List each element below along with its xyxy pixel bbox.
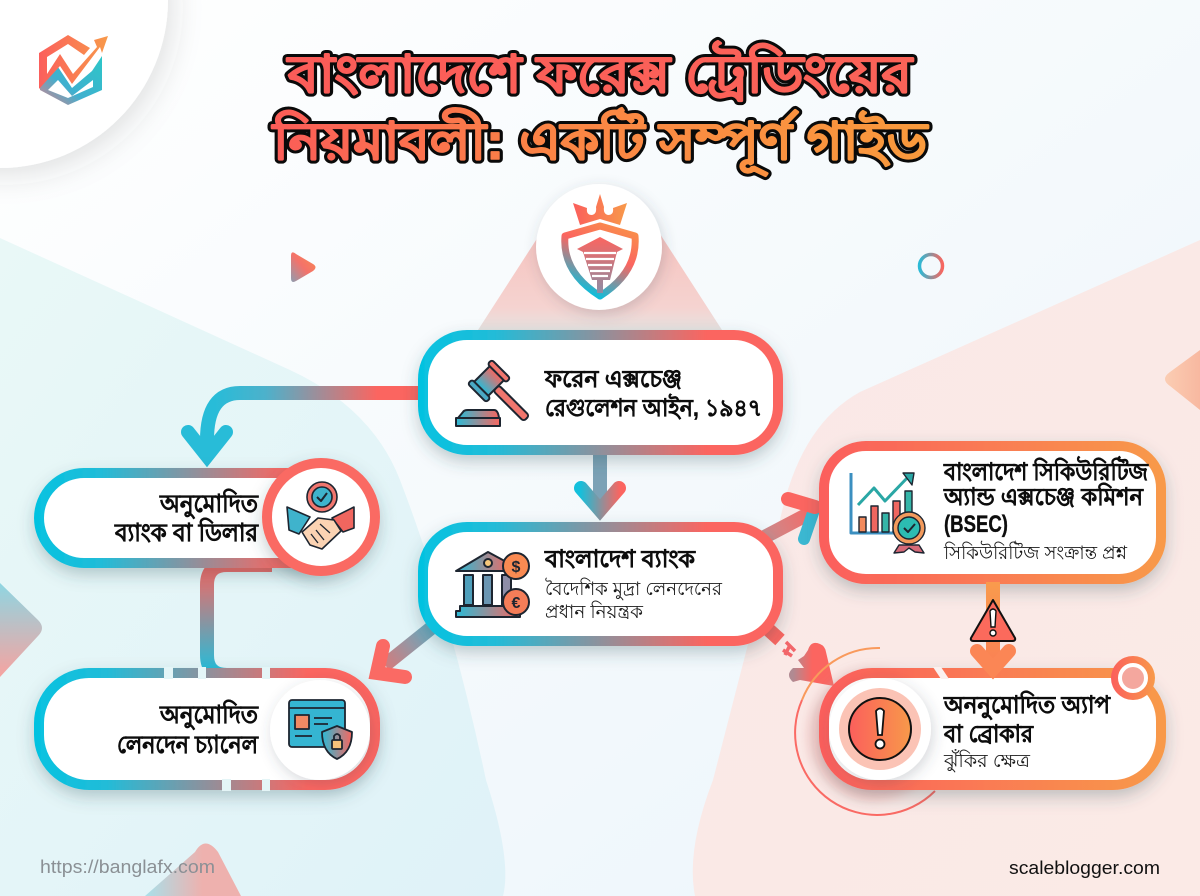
panel: BSEC xyxy=(824,446,1161,579)
text: label: লেনদেন চ্যানেল xyxy=(117,731,259,759)
text: coin symbols: € xyxy=(512,595,521,612)
text: label and note: বা ব্রোকার xyxy=(943,721,1034,748)
footer: left url: https://banglafx.com xyxy=(40,857,215,877)
panel: approved bank or dealer xyxy=(39,463,375,571)
text: bank name and role: প্রধান নিয়ন্ত্রক xyxy=(545,601,644,623)
text: act name: ফরেন এক্সচেঞ্জ xyxy=(544,366,682,393)
text: label: ব্যাংক বা ডিলার xyxy=(114,517,259,547)
text: label and note: ঝুঁকির ক্ষেত্র xyxy=(943,749,1031,772)
text: label: অনুমোদিত xyxy=(159,699,259,731)
icon: bank with coins xyxy=(456,552,529,617)
text: label and note: অননুমোদিত অ্যাপ xyxy=(943,690,1112,720)
logo badge: corner circle xyxy=(0,0,168,168)
title: বাংলাদেশে ফরেক্স ট্রেডিংয়ের xyxy=(286,41,915,104)
icon: gavel xyxy=(456,360,538,430)
arrow: broken link to unapproved brokers xyxy=(760,622,834,686)
text: act name xyxy=(544,366,762,422)
title: বাংলাদেশে ফরেক্স ট্রেডিংয়ের xyxy=(286,41,915,104)
icon: browser with lock shield xyxy=(289,700,352,759)
decorative rings around warning xyxy=(795,648,940,815)
text: act name: রেগুলেশন আইন, ১৯৪৭ xyxy=(545,393,762,422)
icon: warning circle xyxy=(839,688,921,770)
text: bank name and role: বাংলাদেশ ব্যাংক xyxy=(544,546,696,573)
text: BSEC name and note xyxy=(943,456,1149,564)
arrow: law to Bangladesh Bank xyxy=(581,452,619,510)
title: নিয়মাবলী: একটি সম্পূর্ণ গাইড xyxy=(271,108,929,177)
text: bank name and role: বৈদেশিক মুদ্রা লেনদেনের xyxy=(545,578,723,600)
panel: Bangladesh Bank xyxy=(423,527,778,641)
arrow: Bangladesh Bank to approved channel xyxy=(377,625,435,677)
text: BSEC name and note: বাংলাদেশ সিকিউরিটিজ xyxy=(943,456,1149,486)
icon: shield with crown xyxy=(565,194,635,296)
icon: logo hexagon with arrow xyxy=(39,35,108,105)
icon: chart with award xyxy=(851,473,925,553)
title: নিয়মাবলী: একটি সম্পূর্ণ গাইড xyxy=(271,108,929,177)
arrow: Bangladesh Bank to BSEC xyxy=(755,499,815,542)
top shield badge xyxy=(536,184,662,310)
icon: warning triangle xyxy=(971,600,1015,641)
icon: corner ring marker xyxy=(1111,656,1155,700)
text: BSEC name and note: সিকিউরিটিজ সংক্রান্ত প্রশ্ন xyxy=(943,541,1128,564)
text: coin symbols xyxy=(512,559,521,612)
panel: unapproved apps or brokers xyxy=(824,667,1161,785)
title xyxy=(271,41,929,177)
border gaps xyxy=(164,667,270,791)
icon: handshake with badge xyxy=(287,482,354,549)
text: label xyxy=(117,699,259,759)
text: label: অনুমোদিত xyxy=(159,488,259,520)
text: BSEC name and note: (BSEC) xyxy=(944,511,1008,538)
border notch xyxy=(933,667,949,679)
text: label xyxy=(114,488,259,547)
panel: Foreign Exchange Regulation Act xyxy=(423,335,778,450)
arrow: BSEC to unapproved brokers xyxy=(977,582,1009,669)
decorative ring marker xyxy=(920,254,942,278)
connector: approved bank to approved channel xyxy=(207,565,272,675)
panel: approved transaction channel xyxy=(39,667,375,791)
arrow: law to approved bank xyxy=(188,393,420,458)
text: bank name and role xyxy=(544,546,723,623)
text: BSEC name and note: অ্যান্ড এক্সচেঞ্জ কমিশন xyxy=(943,482,1145,511)
footer: right url: scaleblogger.com xyxy=(1009,858,1160,878)
text: label and note xyxy=(943,690,1112,772)
decorative play marker xyxy=(291,252,316,282)
text: coin symbols: $ xyxy=(512,559,521,576)
